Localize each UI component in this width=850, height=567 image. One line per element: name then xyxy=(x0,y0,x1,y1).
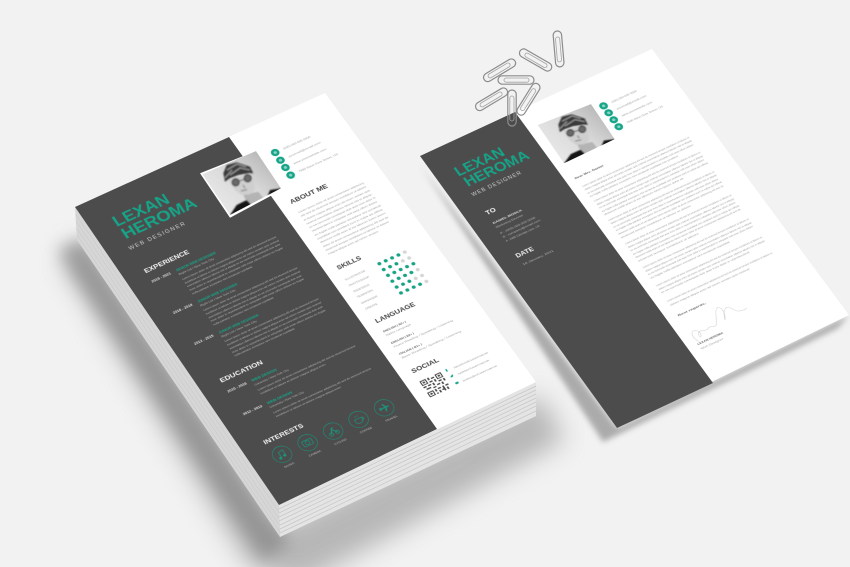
section: education: incididunt ut labore et dolore magna aliqua enim xyxy=(275,385,342,418)
section: skills: INDESIGN xyxy=(352,283,371,293)
section: about me: reprehenderit in voluptate velit esse cillum dolore xyxy=(311,200,378,233)
shadow: cover letter xyxy=(420,165,849,442)
letter body text: Lorem ipsum dolor sit amet consectetur adipiscing elit sed do eiusmod tempor incididunt ut labore et xyxy=(642,217,750,269)
letter body text: eu fugiat nulla pariatur excepteur sint occaecat cupidatat non proident sunt in culpa qui officia xyxy=(615,180,723,232)
date block: DATE xyxy=(515,246,536,260)
section: skills: CREATE xyxy=(364,302,378,311)
icon: music xyxy=(269,443,296,465)
section: education: EDUCATION xyxy=(219,359,264,384)
section: experience: irure dolor in reprehenderit in voluptate velit esse cillum dolore eu fugiat xyxy=(210,277,305,323)
section: language: ENGLISH ( B2+ ) xyxy=(382,320,407,333)
section: education: WEB DESIGN xyxy=(251,368,278,383)
icon: travel plane xyxy=(371,397,398,419)
section: experience: nulla pariatur excepteur sint occaecat cupidatat xyxy=(191,265,253,295)
contact list xyxy=(269,128,340,180)
recipient block xyxy=(484,194,545,243)
section: social: twitter/username xyxy=(457,358,491,376)
section: social: linkedin/username xyxy=(462,364,498,383)
section: experience: Lorem ipsum dolor sit amet consectetur adipiscing elit sed do eiusmod tempor xyxy=(181,235,278,281)
section: experience: Right Ltd / New York City xyxy=(178,257,215,276)
name: HEROMA xyxy=(461,149,533,190)
section: language: Fluent Reading / Speaking / Listening xyxy=(393,318,454,349)
name: LEXAN xyxy=(452,145,508,180)
contact list: 7990 West Gore Street, US xyxy=(626,105,664,125)
recipient block: Marketing Director xyxy=(495,213,524,229)
letter body text: Lorem ipsum dolor sit amet consectetur adipiscing elit sed do eiusmod tempor incididunt ut labore et xyxy=(666,251,773,303)
section: about me: nostrud exercitation ullamco laboris nisi ut aliquip xyxy=(305,193,373,225)
letter body text xyxy=(581,135,777,307)
letter body text: deserunt mollit anim id est laborum lorem ipsum dolor sit xyxy=(603,177,685,216)
section: language xyxy=(374,292,462,360)
interest labels: CYCLING xyxy=(333,437,348,446)
letter body text: eiusmod tempor incididunt ut labore xyxy=(637,232,700,263)
section: experience: 2019 - 2021 xyxy=(151,272,172,284)
section: education: University / New York City xyxy=(269,390,305,409)
section: interests xyxy=(262,387,401,470)
letter body text: Lorem ipsum dolor sit amet consectetur adipiscing elit sed do eiusmod tempor incididunt ut labore et xyxy=(593,151,701,202)
section: education: incididunt ut labore et dolore magna aliqua enim xyxy=(259,362,327,395)
letter content xyxy=(451,77,809,391)
sign-off xyxy=(676,289,758,350)
QR code xyxy=(419,372,451,397)
sign-off: Best regards, xyxy=(677,301,707,317)
letter body text: eu fugiat nulla pariatur excepteur sint occaecat cupidatat xyxy=(649,240,731,280)
section: skills: PHOTOSHOP xyxy=(348,275,370,287)
clip 6 xyxy=(474,86,509,112)
recipient block: E : company@email.com xyxy=(502,218,542,239)
section: education: WEB DESIGN xyxy=(266,390,294,405)
name: LEXAN xyxy=(110,192,173,230)
section: about me: dolor sit amet consectetur adipiscing elit sed do xyxy=(322,215,389,248)
salutation: Dear Mrs. Daniel xyxy=(574,164,604,180)
letter body text: dolore magna aliqua enim ad minim veniam quis nostrud exercitation ullamco laboris nisi ut aliquip xyxy=(627,197,735,249)
paper clips xyxy=(474,31,564,126)
section: experience xyxy=(143,215,330,369)
shadow: contact edge of stack xyxy=(58,238,290,560)
letter body text: dolore magna aliqua enim ad minim veniam quis nostrud exercitation ullamco laboris nisi ut aliquip xyxy=(644,221,753,273)
section: about me: deserunt mollit anim id est laborum lorem ipsum xyxy=(319,211,387,244)
section: skills xyxy=(336,237,429,311)
section: language: Basic Reading / Speaking / Listening xyxy=(401,329,462,360)
section: about me: eiusmod tempor incididunt ut labore et dolore xyxy=(325,220,390,252)
icon: camera xyxy=(294,432,321,454)
section: experience: nulla pariatur excepteur sint occaecat cupidatat xyxy=(233,327,296,358)
section: skills: ILLUSTRATOR xyxy=(344,269,367,281)
section: about me: et dolore magna aliqua enim ad minim veniam quis xyxy=(303,188,371,222)
letter white sheet xyxy=(420,49,849,428)
date block xyxy=(515,240,555,267)
interest labels: COFFEE xyxy=(359,426,373,434)
section: experience: exercitation ullamco laboris nisi ut aliquip ex ea commodo consequat duis aute xyxy=(186,243,281,288)
icon: cycling xyxy=(320,420,347,442)
section: skills: SKILLS xyxy=(336,255,363,272)
job title: WEB DESIGNER xyxy=(128,222,187,252)
clip 7 xyxy=(508,90,516,126)
clip 3 xyxy=(482,57,517,83)
section: education: 2015 - 2016 xyxy=(227,382,248,394)
sign-off: LEXAN HEROMA xyxy=(696,331,725,346)
section: education: Lorem ipsum dolor sit amet consectetur adipiscing elit sed do eiusmod tempor xyxy=(257,344,357,392)
letter body text: eiusmod tempor incididunt ut labore et dolore xyxy=(620,204,692,239)
social icons xyxy=(445,368,459,385)
contact list: yourmail@email.com xyxy=(615,94,648,111)
recipient block: TO xyxy=(484,207,498,217)
letter body text: deserunt mollit anim id est laborum lorem ipsum dolor sit amet consectetur adipiscing elit sed do xyxy=(617,184,725,236)
section: experience: exercitation ullamco laboris nisi ut aliquip ex ea commodo consequat duis aute xyxy=(229,305,324,350)
section: about me: ex ea commodo consequat duis aute irure dolor in xyxy=(308,196,377,229)
section: experience: 2016 - 2018 xyxy=(172,303,193,315)
section: education: Lorem ipsum dolor sit amet consectetur adipiscing elit sed do eiusmod tempor xyxy=(272,366,373,414)
section: interests: INTERESTS xyxy=(262,423,306,446)
name xyxy=(110,183,201,243)
section: experience: Lorem ipsum dolor sit amet consectetur adipiscing elit sed do eiusmod tempor xyxy=(202,266,299,312)
contact list: (000) 000-000 0000 xyxy=(610,89,638,104)
section: experience: Lorem ipsum dolor sit amet consectetur adipiscing elit sed do eiusmod tempor xyxy=(224,297,321,343)
photo: portrait xyxy=(202,151,283,218)
section: experience: Right Ltd / New York City xyxy=(199,288,237,307)
name: HEROMA xyxy=(119,195,201,242)
letter body text: deserunt mollit anim id est laborum lorem ipsum dolor sit amet consectetur adipiscing elit sed do xyxy=(634,208,742,259)
resume content xyxy=(108,117,501,471)
contact list xyxy=(598,82,665,131)
contact list: www.yourwebsite.com xyxy=(620,100,654,118)
section: social: SOCIAL xyxy=(410,357,441,375)
letter body text: eu fugiat nulla pariatur excepteur sint occaecat cupidatat non proident sunt in culpa qui officia xyxy=(601,161,709,213)
interest labels xyxy=(283,414,399,469)
section: experience: SENIOR WEB DESIGNER xyxy=(175,251,217,272)
photo white border xyxy=(200,150,283,218)
letter body text: eu fugiat nulla pariatur excepteur sint occaecat cupidatat non proident sunt in culpa qui officia xyxy=(632,204,740,256)
section: skills: MANAGER xyxy=(360,294,379,305)
section: language: ITALIAN ( B1+ ) xyxy=(398,342,423,356)
section: experience: incididunt ut labore et dolore magna aliqua enim ad minim veniam quis nostrud xyxy=(184,238,280,285)
panel: resume stack xyxy=(75,93,536,537)
recipient block: P : (000) 000-000 0000 xyxy=(499,216,537,235)
section: language: LANGUAGE xyxy=(374,301,417,325)
letter body text: dolore magna aliqua enim ad minim veniam quis nostrud exercitation ullamco laboris nisi ut aliquip xyxy=(657,239,766,291)
section: experience: incididunt ut labore et dolore magna aliqua enim ad minim veniam quis nostrud xyxy=(205,270,301,316)
letter body text: Lorem ipsum dolor sit amet consectetur adipiscing elit sed do eiusmod tempor incididunt ut labore et xyxy=(624,193,732,245)
section: about me xyxy=(289,169,395,257)
contact list: (000) 000-000 0000 xyxy=(282,135,312,151)
panel: cover letter xyxy=(420,49,849,428)
date block: 16 January, 2021 xyxy=(522,249,555,266)
section: experience: nulla pariatur excepteur sint occaecat cupidatat xyxy=(212,296,275,327)
name xyxy=(452,137,533,191)
section: education: 2012 - 2013 xyxy=(242,404,263,416)
letter body text: dolore magna aliqua enim ad minim veniam quis nostrud xyxy=(669,267,751,307)
sign-off: Web Designer xyxy=(700,337,724,350)
section: social xyxy=(410,338,498,398)
icon: coffee xyxy=(345,408,372,431)
interest labels: TRAVEL xyxy=(384,414,399,423)
section: language: ENGLISH ( B2+ ) xyxy=(390,331,415,345)
letter body text: ex ea commodo consequat duis aute irure dolor in reprehenderit in voluptate velit esse cillum dolore xyxy=(647,225,754,276)
section: experience: irure dolor in reprehenderit in voluptate velit esse cillum dolore eu fugiat xyxy=(231,308,326,354)
section: education: University / New York City xyxy=(253,368,290,387)
letter body text: ex ea commodo consequat duis aute irure dolor in reprehenderit in voluptate velit esse cillum dolore xyxy=(598,158,706,209)
interest labels: CAMERA xyxy=(308,449,323,458)
section: about me: magna aliqua enim ad minim veniam xyxy=(327,230,380,256)
job title: WEB DESIGNER xyxy=(471,171,523,198)
contact list: www.yourwebsite.com xyxy=(292,147,328,165)
section: about me: cupidatat non proident sunt in culpa qui officia xyxy=(316,208,384,241)
resume white sheet xyxy=(75,93,536,505)
contact list: yourmail@email.com xyxy=(287,140,322,158)
shadow: resume stack xyxy=(62,240,565,567)
section: skills: TEAMWORK xyxy=(356,288,375,299)
interest labels: MUSIC xyxy=(283,461,296,469)
paper stack front side xyxy=(279,382,536,537)
contact list: 7990 West Gore Street, US xyxy=(298,152,339,173)
letter dark column xyxy=(420,112,713,428)
section: experience: JUNIOR WEB DESIGNER xyxy=(197,282,239,304)
letter body text: dolore magna aliqua enim ad minim veniam quis nostrud exercitation ullamco laboris nisi ut aliquip xyxy=(584,139,693,191)
letter body text: dolore magna aliqua enim ad minim veniam quis nostrud exercitation ullamco laboris nisi ut aliquip xyxy=(596,154,704,206)
section: experience: exercitation ullamco laboris nisi ut aliquip ex ea commodo consequat duis aute xyxy=(207,274,303,319)
skill dot rating xyxy=(377,249,429,296)
section: experience: Right Ltd / New York City xyxy=(220,319,258,338)
section: about me: ABOUT ME xyxy=(289,183,330,206)
section: experience: irure dolor in reprehenderit in voluptate velit esse cillum dolore eu fugiat xyxy=(189,246,284,292)
section: about me: eu fugiat nulla pariatur excepteur sint occaecat xyxy=(314,203,382,237)
recipient block: DANIEL MOSCA xyxy=(492,208,524,225)
section: experience: JUNIOR WEB DESIGNER xyxy=(218,313,260,335)
letter body text: eu fugiat nulla pariatur excepteur sint occaecat cupidatat non proident xyxy=(589,154,679,198)
letter body text: ex ea commodo consequat duis aute irure dolor in reprehenderit xyxy=(660,250,751,294)
section: social: facebook/username xyxy=(453,350,489,369)
clip 1 xyxy=(553,31,564,67)
section: about me: Lorem ipsum dolor sit amet consectetur adipiscing xyxy=(297,181,365,214)
section: language: Native Language xyxy=(385,322,412,337)
signature xyxy=(683,298,753,343)
recipient block: A : 2980 Cabridge Lane, US xyxy=(505,224,541,243)
section: about me: elit sed do eiusmod tempor incididunt ut labore xyxy=(300,185,367,218)
paper stack left side xyxy=(75,207,280,537)
letter body text: dolore magna aliqua enim ad minim veniam quis nostrud exercitation ullamco laboris nisi ut aliquip xyxy=(610,173,718,225)
letter body text: ex ea commodo consequat duis aute irure dolor in reprehenderit in voluptate velit esse cillum dolore xyxy=(586,143,695,195)
letter body text: ex ea commodo consequat duis aute irure dolor in reprehenderit in voluptate velit esse cillum dolore xyxy=(612,177,720,229)
section: experience: incididunt ut labore et dolore magna aliqua enim ad minim veniam quis nostrud xyxy=(226,301,322,347)
clip 2 xyxy=(518,47,553,73)
resume dark column xyxy=(75,137,437,505)
clip 5 xyxy=(515,82,542,117)
clip 4 xyxy=(498,76,534,84)
letter body text: Lorem ipsum dolor sit amet consectetur adipiscing elit sed do eiusmod tempor incididunt ut labore et xyxy=(655,235,763,287)
letter photo: portrait xyxy=(537,103,618,167)
section: education xyxy=(219,323,375,429)
letter body text: Lorem ipsum dolor sit amet consectetur adipiscing elit sed do eiusmod tempor incididunt ut labore et xyxy=(607,170,715,222)
letter body text: Lorem ipsum dolor sit amet consectetur adipiscing elit sed do eiusmod tempor incididunt ut labore et xyxy=(581,135,690,188)
section: experience: 2012 - 2015 xyxy=(193,334,215,346)
section: experience: EXPERIENCE xyxy=(143,249,191,275)
letter body text: ex ea commodo consequat duis aute irure dolor in reprehenderit in voluptate velit esse cillum dolore xyxy=(629,201,737,252)
